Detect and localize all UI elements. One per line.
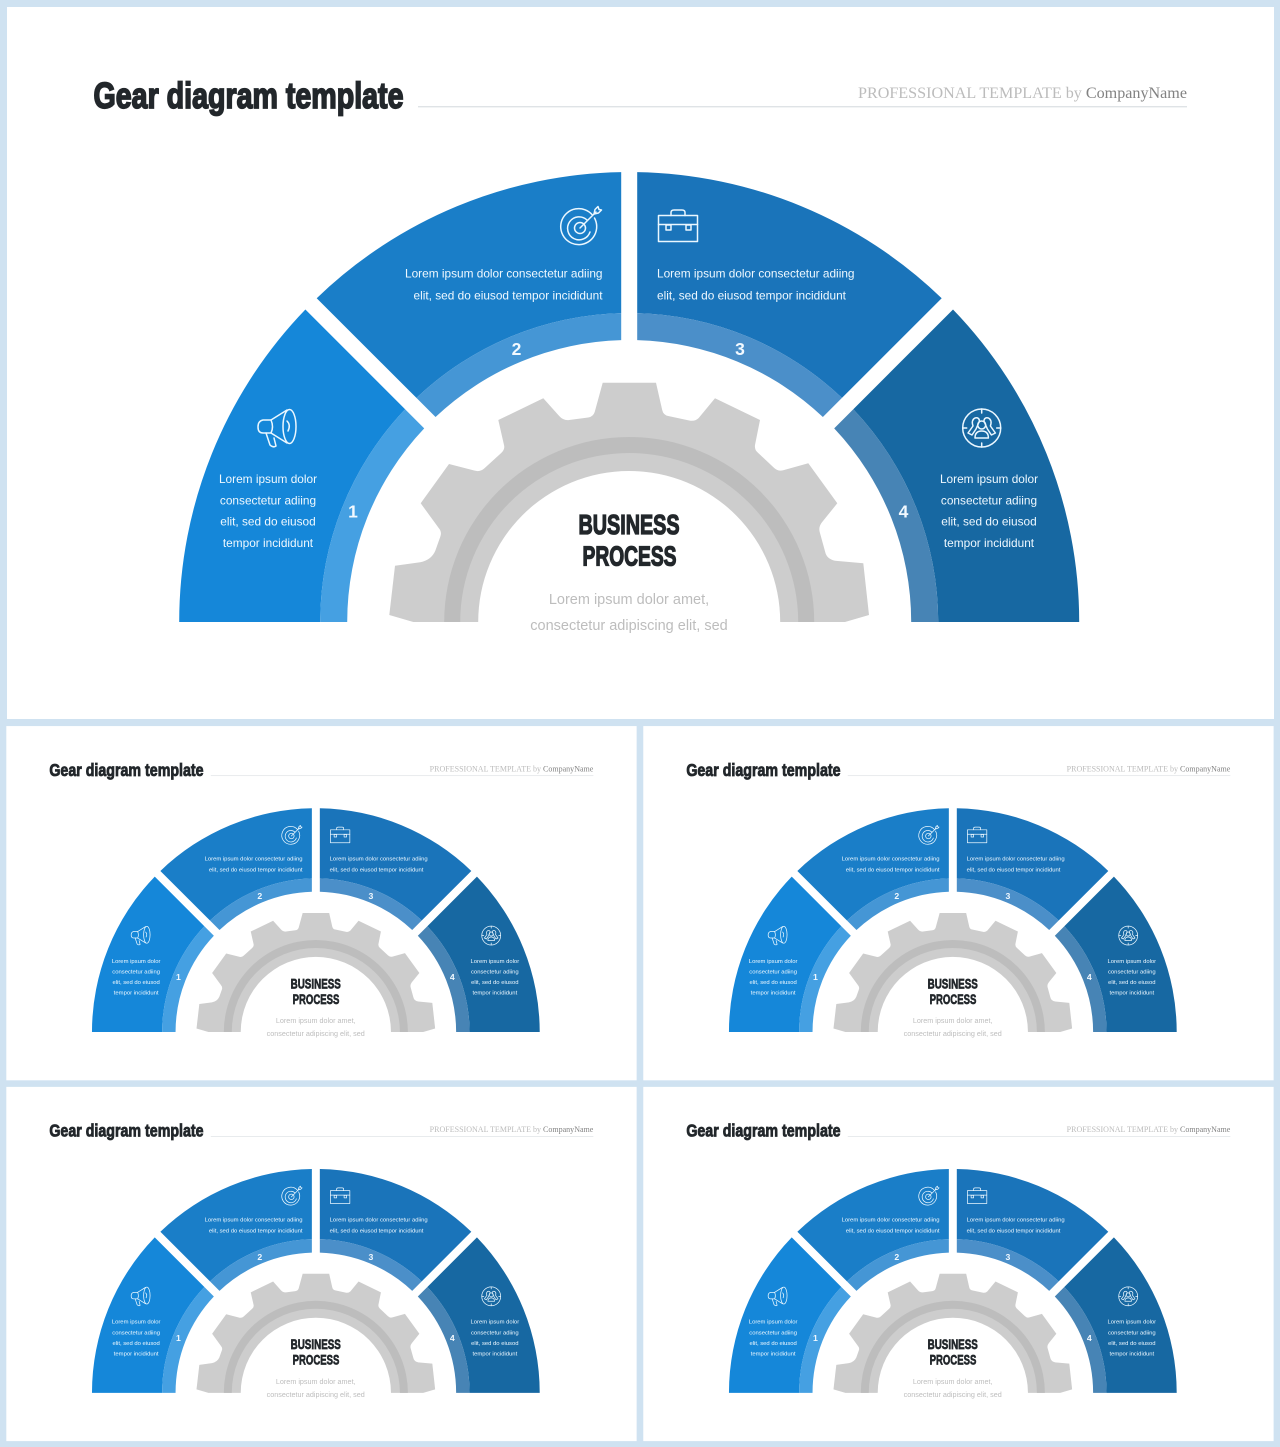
center heading bbox=[578, 509, 680, 572]
center caption: consectetur adipiscing elit, sed bbox=[267, 1029, 365, 1038]
center heading: PROCESS bbox=[582, 540, 676, 572]
text: segment 4: Lorem ipsum dolor bbox=[940, 472, 1038, 486]
panel: small slide top left bbox=[6, 726, 637, 1080]
text: segment 4: tempor incididunt bbox=[472, 1352, 518, 1358]
center caption: Lorem ipsum dolor amet, bbox=[276, 1016, 356, 1025]
numbers: 2 bbox=[894, 1252, 899, 1262]
numbers: 4 bbox=[1087, 1333, 1092, 1343]
text: segment 1: elit, sed do eiusod bbox=[112, 980, 160, 986]
subtitle: PROFESSIONAL TEMPLATE by CompanyName bbox=[430, 1125, 594, 1134]
numbers: 4 bbox=[450, 1333, 455, 1343]
text: segment 1: elit, sed do eiusod bbox=[749, 980, 797, 986]
numbers bbox=[813, 891, 1092, 982]
center caption bbox=[904, 1377, 1002, 1399]
text: segment 1: tempor incididunt bbox=[114, 991, 159, 997]
text: segment 3: Lorem ipsum dolor consectetur adiing bbox=[657, 266, 854, 280]
text: segment 1 bbox=[219, 472, 317, 550]
center caption: consectetur adipiscing elit, sed bbox=[904, 1390, 1002, 1399]
diagram bbox=[92, 808, 540, 1032]
segment 2 bbox=[317, 172, 621, 398]
text: segment 1: tempor incididunt bbox=[114, 1352, 159, 1358]
text: segment 4: elit, sed do eiusod bbox=[941, 514, 1037, 528]
center caption: consectetur adipiscing elit, sed bbox=[904, 1029, 1002, 1038]
text: segment 3 bbox=[330, 1217, 428, 1234]
text: segment 2 bbox=[842, 857, 940, 874]
title: Gear diagram template bbox=[686, 760, 841, 780]
center caption: Lorem ipsum dolor amet, bbox=[913, 1016, 993, 1025]
text: segment 3 bbox=[967, 1217, 1065, 1234]
text: segment 1: consectetur adiing bbox=[749, 970, 797, 976]
segment 4 bbox=[853, 310, 1079, 622]
center caption bbox=[267, 1377, 365, 1399]
text: segment 4 bbox=[1107, 959, 1156, 997]
numbers: 3 bbox=[369, 1252, 374, 1262]
text: segment 2: Lorem ipsum dolor consectetur adiing bbox=[842, 857, 940, 863]
text: segment 1 bbox=[112, 959, 161, 997]
text: segment 4: tempor incididunt bbox=[472, 991, 518, 997]
text: segment 3: elit, sed do eiusod tempor incididunt bbox=[657, 288, 847, 302]
numbers: 2 bbox=[257, 1252, 262, 1262]
segment 1 bbox=[179, 310, 405, 622]
center heading: BUSINESS bbox=[291, 1336, 341, 1352]
center caption: Lorem ipsum dolor amet, bbox=[913, 1377, 993, 1386]
numbers: 3 bbox=[1006, 891, 1011, 901]
center heading: BUSINESS bbox=[578, 509, 680, 540]
panel: small slide top right bbox=[643, 726, 1274, 1080]
center heading bbox=[928, 1336, 978, 1368]
numbers: 1 bbox=[813, 972, 818, 982]
text: segment 4: tempor incididunt bbox=[1109, 991, 1155, 997]
text: segment 4: tempor incididunt bbox=[944, 536, 1035, 550]
text: segment 4: Lorem ipsum dolor bbox=[1107, 1320, 1156, 1326]
text: segment 2 bbox=[205, 857, 303, 874]
numbers: 4 bbox=[899, 502, 909, 522]
gear bbox=[389, 383, 869, 622]
text: segment 2: elit, sed do eiusod tempor incididunt bbox=[846, 1228, 940, 1234]
text: segment 4: Lorem ipsum dolor bbox=[471, 1320, 519, 1326]
text: segment 1: Lorem ipsum dolor bbox=[112, 959, 161, 965]
text: segment 4: consectetur adiing bbox=[471, 970, 519, 976]
text: segment 4: elit, sed do eiusod bbox=[471, 1341, 519, 1347]
text: segment 4: elit, sed do eiusod bbox=[471, 980, 519, 986]
numbers: 1 bbox=[813, 1333, 818, 1343]
numbers: 1 bbox=[176, 1333, 181, 1343]
numbers: 4 bbox=[450, 972, 455, 982]
numbers: 3 bbox=[735, 339, 745, 359]
text: segment 1 bbox=[749, 1320, 797, 1358]
numbers: 2 bbox=[512, 339, 522, 359]
text: segment 2: Lorem ipsum dolor consectetur adiing bbox=[842, 1217, 940, 1223]
diagram bbox=[92, 1169, 540, 1393]
numbers: 2 bbox=[257, 891, 262, 901]
text: segment 3: Lorem ipsum dolor consectetur adiing bbox=[967, 857, 1065, 863]
text: segment 1: Lorem ipsum dolor bbox=[112, 1320, 161, 1326]
text: segment 3: elit, sed do eiusod tempor incididunt bbox=[330, 868, 424, 874]
text: segment 4: tempor incididunt bbox=[1109, 1352, 1155, 1358]
text: segment 3: Lorem ipsum dolor consectetur adiing bbox=[967, 1217, 1065, 1223]
icon: megaphone bbox=[258, 410, 296, 447]
center caption: consectetur adipiscing elit, sed bbox=[530, 618, 728, 634]
text: segment 2 bbox=[405, 266, 603, 302]
numbers bbox=[176, 891, 455, 982]
segment 4 band bbox=[834, 409, 938, 622]
text: segment 4: consectetur adiing bbox=[1108, 1330, 1156, 1336]
numbers bbox=[813, 1252, 1092, 1343]
text: segment 1: tempor incididunt bbox=[223, 536, 314, 550]
text: segment 4: elit, sed do eiusod bbox=[1108, 1341, 1156, 1347]
icons bbox=[131, 825, 501, 945]
center heading: BUSINESS bbox=[291, 975, 341, 991]
text: segment 3 bbox=[967, 857, 1065, 874]
text: segment 3: Lorem ipsum dolor consectetur adiing bbox=[330, 857, 428, 863]
text: segment 3 bbox=[657, 266, 854, 302]
text: segment 2: Lorem ipsum dolor consectetur adiing bbox=[405, 266, 602, 280]
text: segment 1: tempor incididunt bbox=[751, 991, 796, 997]
numbers bbox=[176, 1252, 455, 1343]
center heading bbox=[291, 975, 341, 1007]
text: segment 4 bbox=[940, 472, 1038, 550]
icon: target bbox=[561, 206, 602, 245]
text: segment 1: consectetur adiing bbox=[112, 1330, 160, 1336]
text: segment 4 bbox=[471, 1320, 519, 1358]
center heading: PROCESS bbox=[930, 991, 976, 1007]
text: segment 1: tempor incididunt bbox=[751, 1352, 796, 1358]
text: segment 4: Lorem ipsum dolor bbox=[1107, 959, 1156, 965]
diagram bbox=[729, 808, 1177, 1032]
panel: small slide bottom left bbox=[6, 1087, 637, 1441]
icons bbox=[768, 1186, 1138, 1306]
center heading: BUSINESS bbox=[928, 975, 978, 991]
numbers: 3 bbox=[369, 891, 374, 901]
numbers: 1 bbox=[348, 502, 358, 522]
gear ring bbox=[444, 437, 814, 622]
center heading: BUSINESS bbox=[928, 1336, 978, 1352]
text: segment 3: elit, sed do eiusod tempor incididunt bbox=[967, 868, 1061, 874]
text: segment 3: elit, sed do eiusod tempor incididunt bbox=[967, 1228, 1061, 1234]
center heading: PROCESS bbox=[293, 991, 339, 1007]
center caption bbox=[267, 1016, 365, 1038]
segment 3 bbox=[637, 172, 942, 398]
text: segment 1: elit, sed do eiusod bbox=[220, 514, 316, 528]
icon: briefcase bbox=[658, 210, 698, 242]
subtitle: PROFESSIONAL TEMPLATE by CompanyName bbox=[1067, 1125, 1231, 1134]
center caption: Lorem ipsum dolor amet, bbox=[276, 1377, 356, 1386]
text: segment 1 bbox=[112, 1320, 161, 1358]
center caption bbox=[530, 592, 728, 634]
title: Gear diagram template bbox=[49, 1121, 204, 1141]
text: segment 1: Lorem ipsum dolor bbox=[749, 959, 797, 965]
text: segment 4: Lorem ipsum dolor bbox=[471, 959, 519, 965]
text: segment 1: consectetur adiing bbox=[112, 970, 160, 976]
center caption: consectetur adipiscing elit, sed bbox=[267, 1390, 365, 1399]
text: segment 4: consectetur adiing bbox=[1108, 970, 1156, 976]
title: Gear diagram template bbox=[49, 760, 204, 780]
panel: main slide bbox=[7, 7, 1274, 719]
text: segment 2: elit, sed do eiusod tempor incididunt bbox=[209, 1228, 303, 1234]
panel: small slide bottom right bbox=[643, 1087, 1274, 1441]
text: segment 3 bbox=[330, 857, 428, 874]
segment 3 band bbox=[637, 313, 842, 417]
text: segment 2: elit, sed do eiusod tempor incididunt bbox=[414, 288, 603, 302]
numbers: 3 bbox=[1006, 1252, 1011, 1262]
diagram bbox=[729, 1169, 1177, 1393]
segment 2 band bbox=[416, 313, 621, 417]
text: segment 4 bbox=[1107, 1320, 1156, 1358]
text: segment 1: Lorem ipsum dolor bbox=[219, 472, 317, 486]
text: segment 2: elit, sed do eiusod tempor incididunt bbox=[209, 868, 303, 874]
text: segment 1: consectetur adiing bbox=[220, 494, 316, 508]
text: segment 3: Lorem ipsum dolor consectetur adiing bbox=[330, 1217, 428, 1223]
center caption: Lorem ipsum dolor amet, bbox=[549, 592, 709, 608]
text: segment 4: consectetur adiing bbox=[471, 1330, 519, 1336]
title: Gear diagram template bbox=[94, 75, 404, 116]
text: segment 1: consectetur adiing bbox=[749, 1330, 797, 1336]
center caption bbox=[904, 1016, 1002, 1038]
text: segment 2: Lorem ipsum dolor consectetur adiing bbox=[205, 1217, 303, 1223]
numbers bbox=[348, 339, 909, 522]
subtitle: PROFESSIONAL TEMPLATE by CompanyName bbox=[858, 85, 1187, 102]
text: segment 1 bbox=[749, 959, 797, 997]
subtitle: PROFESSIONAL TEMPLATE by CompanyName bbox=[1067, 764, 1231, 773]
center heading bbox=[928, 975, 978, 1007]
text: segment 1: elit, sed do eiusod bbox=[749, 1341, 797, 1347]
text: segment 4: elit, sed do eiusod bbox=[1108, 980, 1156, 986]
segment 1 band bbox=[320, 409, 424, 622]
text: segment 1: Lorem ipsum dolor bbox=[749, 1320, 797, 1326]
title: Gear diagram template bbox=[686, 1121, 841, 1141]
text: segment 3: elit, sed do eiusod tempor incididunt bbox=[330, 1228, 424, 1234]
text: segment 2 bbox=[205, 1217, 303, 1234]
numbers: 4 bbox=[1087, 972, 1092, 982]
center heading bbox=[291, 1336, 341, 1368]
center heading: PROCESS bbox=[930, 1352, 976, 1368]
icons bbox=[768, 825, 1138, 945]
icon: team bbox=[963, 409, 1001, 447]
center heading: PROCESS bbox=[293, 1352, 339, 1368]
numbers: 1 bbox=[176, 972, 181, 982]
text: segment 2 bbox=[842, 1217, 940, 1234]
text: segment 4 bbox=[471, 959, 519, 997]
text: segment 2: elit, sed do eiusod tempor incididunt bbox=[846, 868, 940, 874]
text: segment 1: elit, sed do eiusod bbox=[112, 1341, 160, 1347]
icons bbox=[131, 1186, 501, 1306]
text: segment 2: Lorem ipsum dolor consectetur adiing bbox=[205, 857, 303, 863]
text: segment 4: consectetur adiing bbox=[941, 494, 1037, 508]
subtitle: PROFESSIONAL TEMPLATE by CompanyName bbox=[430, 764, 594, 773]
numbers: 2 bbox=[894, 891, 899, 901]
